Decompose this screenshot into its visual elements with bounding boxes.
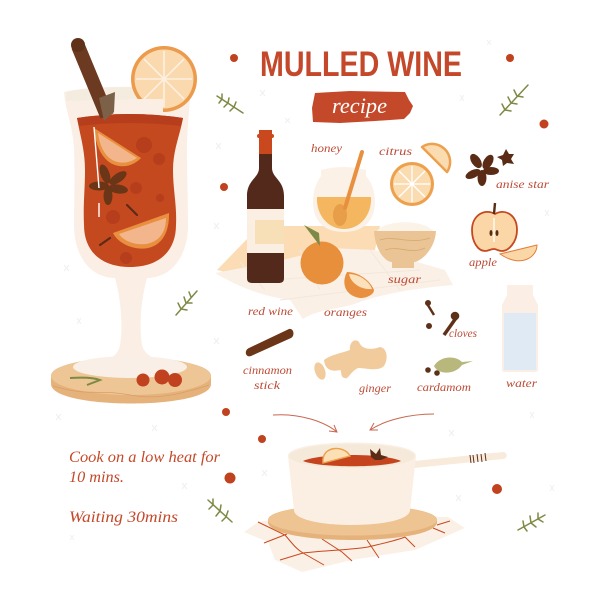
ingredient labels: cinnamon bbox=[243, 363, 292, 377]
cinnamon stick bbox=[246, 329, 293, 356]
ingredient labels: cardamom bbox=[417, 380, 471, 394]
glass bbox=[64, 87, 190, 378]
ingredient labels: honey bbox=[311, 141, 343, 155]
board under glass bbox=[51, 357, 211, 404]
orange slice on glass rim bbox=[128, 46, 197, 116]
ingredient labels: water bbox=[506, 376, 537, 390]
berries on board bbox=[136, 370, 182, 387]
cinnamon stick in glass bbox=[71, 38, 115, 121]
ingredient labels: anise star bbox=[496, 177, 549, 191]
berries bbox=[220, 54, 548, 494]
pot handle bbox=[414, 452, 507, 468]
cardamom bbox=[425, 357, 473, 376]
apple wedge bbox=[500, 245, 537, 261]
cloth under pot bbox=[244, 515, 465, 572]
instructions text bbox=[69, 449, 221, 526]
citrus wedge bbox=[422, 144, 450, 172]
ingredient labels: citrus bbox=[379, 144, 412, 158]
ingredient labels: red wine bbox=[248, 304, 294, 318]
orange wedges in glass bbox=[94, 127, 169, 249]
title: MULLED WINE bbox=[260, 45, 462, 84]
ingredient labels: stick bbox=[254, 378, 281, 392]
rosemary sprigs bbox=[176, 85, 545, 531]
ingredient labels: sugar bbox=[388, 272, 421, 286]
lemon slice in pot bbox=[323, 448, 350, 463]
instructions text: 10 mins. bbox=[69, 469, 124, 486]
star anise in glass bbox=[89, 163, 129, 205]
board under pot bbox=[268, 504, 437, 540]
recipe banner: recipe bbox=[332, 93, 387, 118]
ingredient labels: oranges bbox=[324, 305, 367, 319]
instructions text: Waiting 30mins bbox=[69, 509, 178, 526]
ingredient labels bbox=[243, 141, 549, 395]
rosemary on board bbox=[70, 378, 100, 385]
arrow left bbox=[273, 415, 337, 432]
instructions text: Cook on a low heat for bbox=[69, 449, 221, 466]
ingredient labels: ginger bbox=[359, 381, 391, 395]
apple bbox=[472, 203, 517, 251]
arrow right bbox=[370, 414, 434, 430]
star anise in pot bbox=[370, 448, 388, 460]
star anise large bbox=[464, 152, 499, 186]
cloves bbox=[426, 300, 459, 335]
ginger bbox=[312, 340, 387, 381]
wine bottle bbox=[247, 130, 284, 283]
recipe banner bbox=[312, 91, 413, 123]
cloth under ingredients bbox=[215, 226, 453, 319]
sugar bowl bbox=[374, 222, 436, 268]
ingredient labels: cloves bbox=[449, 326, 477, 340]
citrus slice bbox=[390, 162, 434, 206]
ingredient labels: apple bbox=[469, 255, 498, 269]
pot bbox=[288, 442, 416, 525]
half orange bbox=[344, 272, 374, 298]
water bottle bbox=[502, 285, 538, 372]
orange bbox=[300, 225, 344, 284]
wine in glass bbox=[77, 114, 183, 267]
honey jar bbox=[313, 152, 375, 232]
star anise small bbox=[497, 149, 514, 166]
